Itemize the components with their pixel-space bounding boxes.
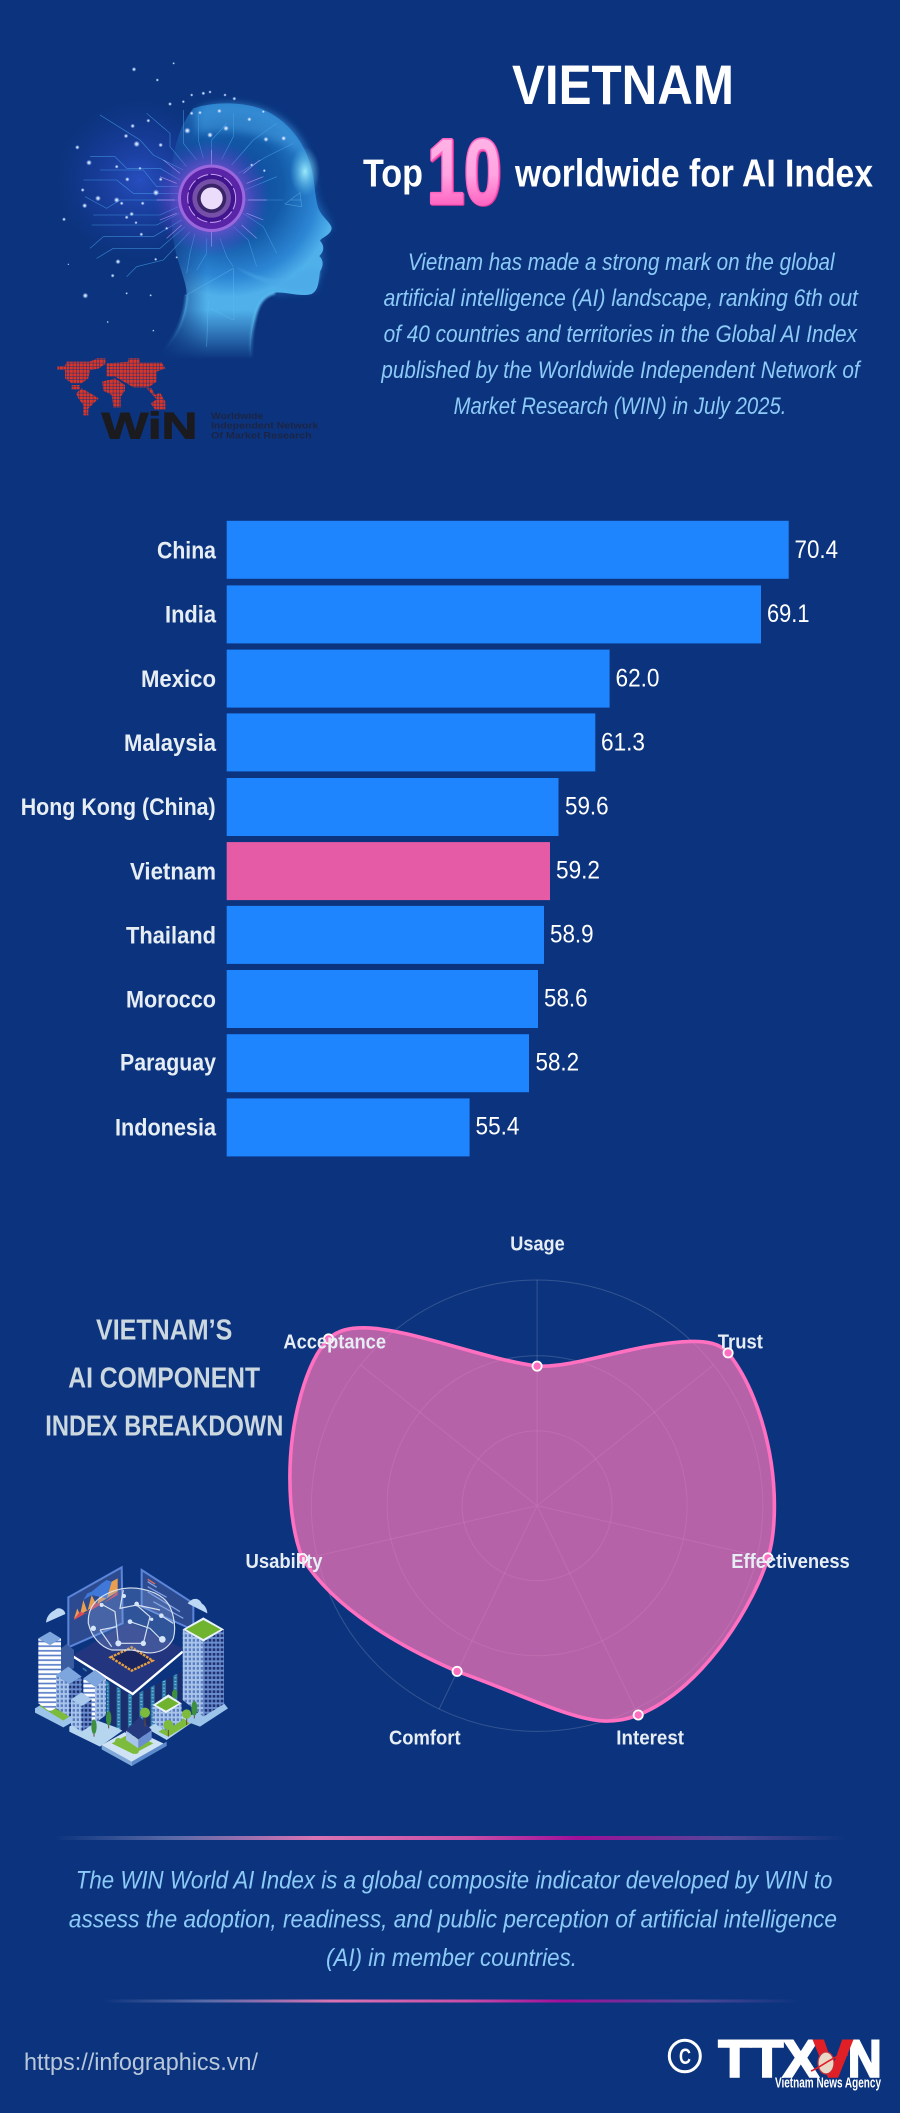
bar: India: 69.1	[767, 600, 810, 628]
heading: Vietnam's AI component index breakdown: INDEX BREAKDOWN	[45, 1411, 283, 1443]
data centre	[74, 1663, 182, 1737]
central platform	[73, 1622, 183, 1694]
note text: assess the adoption, readiness, and public perception of artificial intelligence	[69, 1905, 837, 1933]
bar: China: China	[157, 538, 216, 564]
bar: Vietnam highlighted: 59.2	[556, 856, 600, 884]
divider: bottom	[103, 2000, 798, 2002]
WIN tagline	[211, 411, 318, 440]
bar: Indonesia	[115, 1098, 520, 1156]
logo: TTXVN Vietnam News Agency	[718, 2030, 882, 2092]
bar: Malaysia: 61.3	[601, 728, 645, 756]
intro paragraph	[381, 249, 862, 420]
bar: Paraguay: 58.2	[536, 1048, 579, 1076]
radar axis labels: Effectiveness	[731, 1550, 850, 1573]
forehead highlight	[290, 147, 320, 197]
big pink number 10: 10	[427, 121, 501, 223]
radar axis labels: Usability	[246, 1550, 323, 1573]
title: VIETNAM	[512, 53, 734, 116]
left screen with chart	[68, 1567, 123, 1647]
big right tower	[183, 1617, 224, 1717]
divider: top	[54, 1836, 846, 1840]
subtitle: Top 10 worldwide for AI Index	[363, 121, 873, 223]
wordmark	[718, 2030, 882, 2088]
bar: Hong Kong (China): 59.6	[565, 792, 609, 820]
bar: Morocco: Morocco	[126, 986, 216, 1014]
bright neck edges	[170, 292, 276, 356]
bar: Mexico: Mexico	[141, 666, 216, 693]
illustration: isometric smart city with AI brain	[35, 1567, 228, 1766]
heading: Vietnam's AI component index breakdown	[45, 1314, 283, 1443]
jaw highlight	[235, 267, 320, 292]
chip glow	[153, 140, 270, 257]
radar axis labels: Comfort	[389, 1726, 461, 1749]
radar data area	[290, 1328, 774, 1721]
bar: Malaysia: Malaysia	[124, 730, 216, 757]
wordmark: TTX	[718, 2030, 819, 2088]
radar axis labels	[246, 1232, 850, 1749]
radar axis labels: Trust	[718, 1331, 763, 1354]
world map	[57, 358, 165, 415]
bar: Indonesia: 55.4	[476, 1112, 520, 1140]
copyright symbol	[669, 2040, 700, 2072]
chip core	[178, 165, 245, 232]
intro paragraph: Market Research (WIN) in July 2025.	[454, 393, 786, 420]
head silhouette glow	[200, 105, 332, 293]
wordmark: N	[848, 2030, 882, 2088]
WIN tagline: Independent Network	[211, 421, 318, 431]
particles	[62, 62, 286, 332]
bar: Morocco	[126, 970, 588, 1028]
bar chart: Global AI Index ranking	[21, 521, 838, 1156]
subtitle word: Top: Top	[363, 153, 423, 196]
bar: India: India	[165, 602, 216, 628]
heading: Vietnam's AI component index breakdown: AI COMPONENT	[68, 1363, 260, 1395]
solar building	[126, 1717, 152, 1748]
radar axis labels: Acceptance	[283, 1331, 386, 1354]
AI brain	[88, 1588, 175, 1653]
clouds	[46, 1599, 207, 1623]
crown tint	[197, 104, 308, 157]
WIN wordmark: WiN	[102, 404, 197, 446]
head silhouette	[157, 103, 332, 358]
logo: WIN Worldwide Independent Network of Market Research	[57, 358, 318, 446]
heading: Vietnam's AI component index breakdown: VIETNAM’S	[96, 1314, 232, 1346]
note text: (AI) in member countries.	[326, 1944, 577, 1972]
bar: Thailand	[126, 906, 594, 964]
radar axis labels: Usage	[510, 1232, 565, 1255]
bar: Thailand: Thailand	[126, 922, 216, 950]
white striped tower	[38, 1632, 74, 1712]
base plates	[35, 1703, 228, 1766]
bar: Hong Kong (China)	[21, 778, 609, 836]
brain nodes	[91, 1594, 166, 1646]
bar: Mexico: 62.0	[616, 664, 660, 692]
radar axis labels: Interest	[616, 1726, 684, 1749]
right screen with code	[142, 1570, 193, 1630]
WIN tagline: Worldwide	[211, 411, 263, 421]
neck and face lines	[185, 193, 302, 347]
note text	[69, 1866, 837, 1972]
bar: Paraguay: Paraguay	[120, 1050, 216, 1076]
WIN tagline: Of Market Research	[211, 430, 312, 440]
source url: https://infographics.vn/	[24, 2049, 258, 2076]
bar: India	[165, 585, 810, 643]
chip rays	[157, 150, 267, 247]
glow behind circuits	[57, 100, 223, 260]
circuit lines	[83, 110, 293, 277]
wordmark: V	[814, 2030, 852, 2088]
bar: China: 70.4	[794, 536, 838, 564]
chip	[111, 1647, 153, 1671]
bar: Hong Kong (China): Hong Kong (China)	[21, 794, 216, 821]
radar chart: component index	[246, 1232, 850, 1749]
bar: Morocco: 58.6	[544, 984, 588, 1012]
illustration: AI head with circuit brain	[57, 62, 332, 358]
emblem	[811, 2052, 848, 2074]
intro paragraph: Vietnam has made a strong mark on the global	[408, 249, 835, 276]
bar: Malaysia	[124, 713, 645, 771]
bar: Mexico	[141, 650, 660, 708]
copyright symbol: C	[679, 2044, 691, 2069]
radar data points	[298, 1334, 773, 1720]
bar: Thailand: 58.9	[550, 920, 594, 948]
green roof building	[153, 1694, 182, 1731]
trees	[91, 1689, 197, 1754]
note text: The WIN World AI Index is a global composite indicator developed by WIN to	[76, 1866, 832, 1894]
bar: Vietnam highlighted: Vietnam	[130, 858, 216, 886]
bar: Vietnam highlighted	[130, 842, 600, 900]
left block towers	[56, 1667, 106, 1732]
bar: Indonesia: Indonesia	[115, 1114, 216, 1142]
bar: China	[157, 521, 838, 579]
bar: Paraguay	[120, 1034, 579, 1092]
